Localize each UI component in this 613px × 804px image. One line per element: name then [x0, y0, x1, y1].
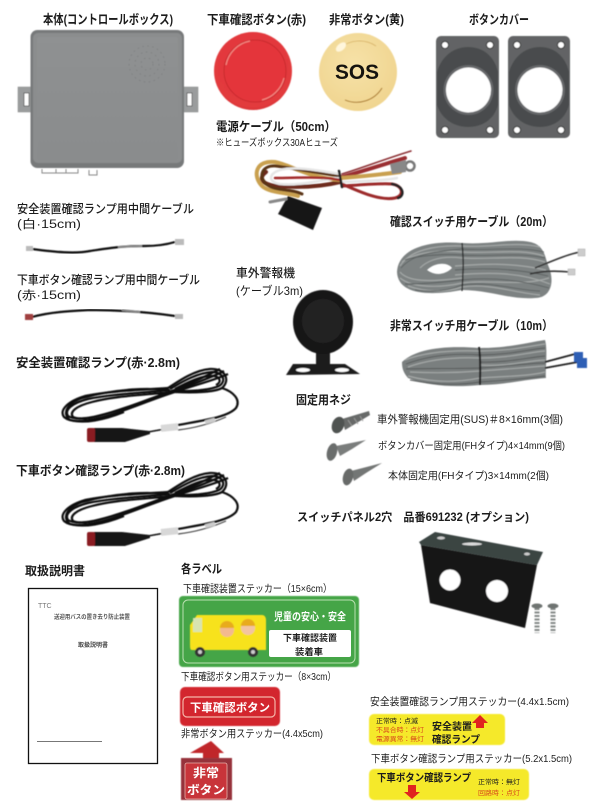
panel: control box: [18, 12, 198, 175]
icon: emergency sticker: ボタン: [187, 783, 225, 797]
panel: alight button lamp: [16, 463, 238, 546]
icon: switch panel bracket: [419, 532, 543, 628]
heading: safety lamp relay cable: 安全装置確認ランプ用中間ケーブル: [17, 201, 194, 216]
icon: screw 3: [341, 463, 382, 487]
text: screw 1 label: 車外警報機固定用(SUS)＃8×16mm(3個): [377, 412, 563, 426]
note: fuse box: ※ヒューズボックス30Aヒューズ: [216, 136, 338, 149]
heading: switch panel: スイッチパネル2穴 品番691232 (オプション): [297, 510, 529, 524]
heading: power cable: 電源ケーブル（50cm）: [216, 119, 336, 134]
icon: yellow school bus: [190, 615, 266, 657]
icon: lamp coil 1: [63, 369, 238, 442]
icon: white relay cable: [26, 239, 184, 252]
text: alight lamp sticker caption: 下車ボタン確認ランプ用ステッカー(5.2x1.5cm): [371, 752, 572, 765]
text: cable 3m: (ケーブル3m): [236, 283, 303, 298]
panel: lamp stickers: [369, 695, 572, 800]
text: red sticker caption: 下車確認ボタン用ステッカー（8×3cm）: [181, 670, 336, 683]
icon: green sticker: 装着車: [295, 646, 323, 657]
panel: button covers: [436, 13, 570, 138]
icon: small screws: [532, 604, 558, 633]
icon: screw 2: [325, 440, 366, 462]
icon: manual cover page: TTC: [38, 603, 52, 610]
panel: instruction manual: [25, 563, 158, 764]
icon: SOS button: SOS: [335, 61, 379, 84]
icon: alight lamp sticker: 正常時：無灯: [478, 777, 521, 786]
panel: confirm switch cable: [390, 214, 585, 298]
icon: alarm siren: [286, 290, 360, 375]
icon: alight lamp sticker: 回路時：点灯: [478, 788, 521, 797]
icon: emergency sticker: [181, 741, 232, 800]
panel: red alight-confirm button: [207, 12, 306, 110]
text: screw 2 label: ボタンカバー固定用(FHタイプ)4×14mm(9個): [378, 439, 565, 452]
panel: yellow emergency button: [319, 12, 404, 111]
panel: emergency switch cable: [390, 318, 587, 386]
panel: exterior alarm: [236, 265, 360, 375]
icon: red button: [214, 32, 292, 110]
heading: button covers: ボタンカバー: [469, 13, 529, 27]
icon: safety lamp sticker: [369, 714, 505, 746]
text: red 15cm: (赤·15cm): [17, 289, 81, 302]
icon: red relay cable: [25, 310, 183, 320]
icon: alight lamp sticker: [369, 769, 529, 800]
icon: lamp coil 2: [63, 473, 238, 546]
panel: labels: [179, 561, 359, 800]
icon: gray coil 20m: [397, 241, 585, 298]
icon: button cover right: [508, 36, 570, 138]
icon: safety lamp sticker: 不具合時：点灯: [376, 725, 425, 734]
icon: red sticker: 下車確認ボタン: [190, 700, 270, 714]
icon: manual cover page: [28, 588, 158, 764]
icon: emergency sticker: 非常: [193, 765, 219, 780]
heading: labels: 各ラベル: [181, 561, 222, 576]
text: safety lamp sticker caption: 安全装置確認ランプ用ステッカー(4.4x1.5cm): [370, 695, 569, 708]
icon: safety lamp sticker: 安全装置: [432, 720, 472, 733]
heading: safety lamp: 安全装置確認ランプ(赤·2.8m): [16, 355, 180, 370]
icon: gray coil 10m: [402, 340, 587, 386]
icon: screw 1: [329, 411, 370, 435]
text: emergency sticker caption: 非常ボタン用ステッカー(4.4x5cm): [181, 727, 323, 740]
icon: manual cover page: 取扱説明書: [78, 641, 108, 649]
panel: safety device lamp: [16, 355, 238, 442]
panel: switch panel option: [297, 510, 558, 633]
icon: alight lamp sticker: 下車ボタン確認ランプ: [377, 771, 471, 784]
heading: control box: 本体(コントロールボックス): [43, 12, 173, 27]
heading: exterior alarm: 車外警報機: [236, 265, 295, 280]
icon: manual cover page: 送迎用バスの置き去り防止装置: [54, 613, 130, 621]
text: white 15cm: (白·15cm): [17, 217, 81, 231]
icon: safety lamp sticker: 電源異常：無灯: [376, 734, 425, 743]
icon: red sticker: [180, 687, 280, 726]
heading: yellow button: 非常ボタン(黄): [329, 12, 404, 27]
icon: control box body: [18, 30, 198, 175]
heading: alight lamp: 下車ボタン確認ランプ(赤·2.8m): [16, 463, 185, 478]
heading: emergency switch cable: 非常スイッチ用ケーブル（10m）: [390, 318, 553, 333]
panel: safety lamp relay cable: [17, 201, 194, 252]
icon: green sticker: [179, 596, 359, 667]
heading: fixing screws: 固定用ネジ: [296, 393, 351, 407]
icon: button cover left: [436, 36, 499, 138]
heading: alight lamp relay cable: 下車ボタン確認ランプ用中間ケーブル: [17, 272, 200, 287]
heading: confirm switch cable: 確認スイッチ用ケーブル（20m）: [390, 214, 553, 229]
icon: green sticker: 児童の安心・安全: [274, 610, 346, 623]
icon: safety lamp sticker: 確認ランプ: [432, 733, 480, 746]
heading: red button: 下車確認ボタン(赤): [207, 12, 306, 27]
text: screw 3 label: 本体固定用(FHタイプ)3×14mm(2個): [388, 469, 549, 482]
panel: alight lamp relay cable: [17, 272, 200, 320]
icon: power cable harness: [257, 151, 414, 230]
text: green sticker caption: 下車確認装置ステッカー（15×6cm）: [183, 582, 332, 595]
panel: fixing screws: [296, 393, 565, 487]
panel: power cable: [216, 119, 414, 230]
icon: green sticker: 下車確認装置: [283, 632, 337, 643]
heading: manual: 取扱説明書: [25, 563, 85, 578]
icon: safety lamp sticker: 正常時：点滅: [376, 716, 419, 725]
